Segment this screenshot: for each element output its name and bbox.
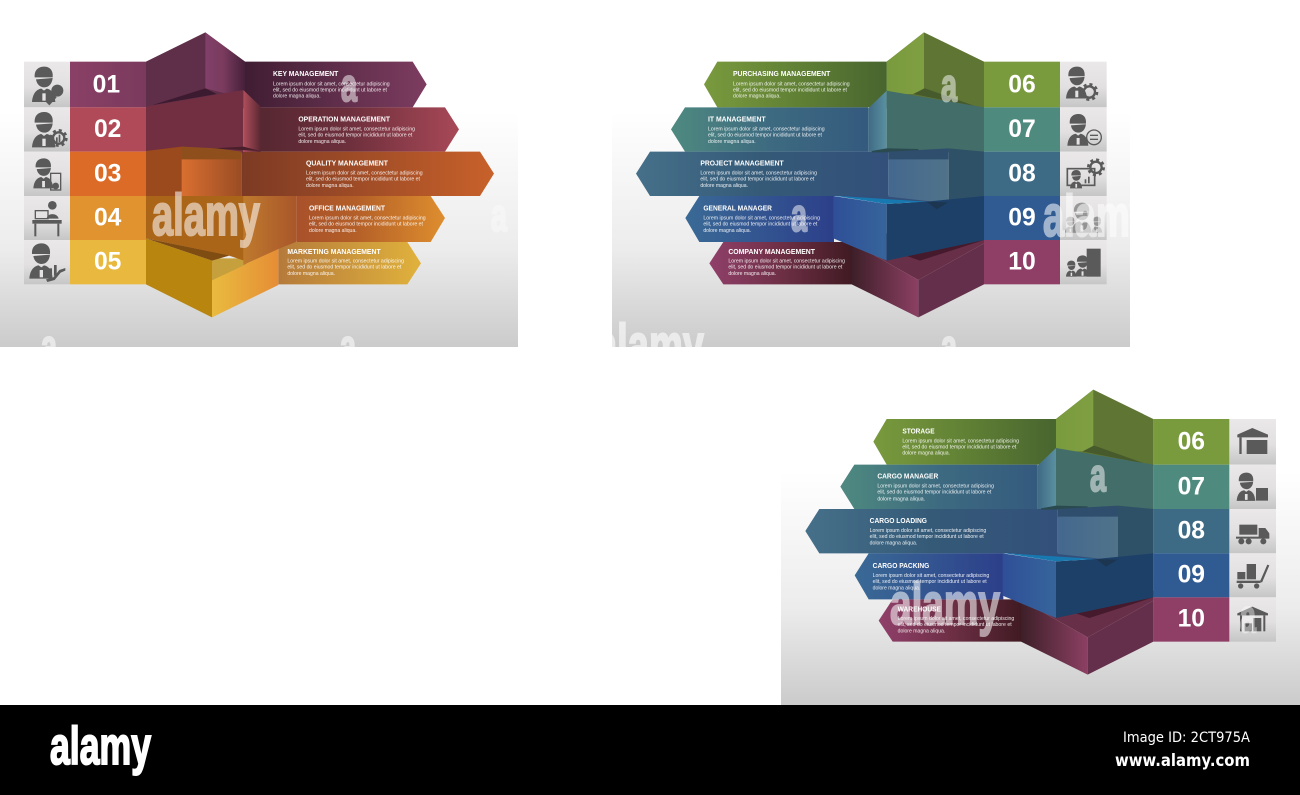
text: project management: dolore magna aliqua.	[700, 183, 748, 189]
text: operation management: OPERATION MANAGEMENT	[298, 114, 390, 123]
text: purchasing management: Lorem ipsum dolor sit amet, consectetur adipiscing	[733, 81, 850, 87]
watermarks panel three	[890, 465, 1257, 637]
footer bar	[0, 705, 1300, 795]
text: project management: elit, sed do eiusmod tempor incididunt ut labore et	[700, 177, 815, 183]
icon: warehouse with boxes	[1237, 607, 1268, 631]
text: marketing management: elit, sed do eiusmod tempor incididunt ut labore et	[287, 265, 402, 271]
text: cargo manager: CARGO MANAGER	[877, 472, 939, 481]
arrow 06	[873, 419, 1056, 465]
text: general manager: elit, sed do eiusmod tempor incididunt ut labore et	[703, 222, 818, 228]
icon: manager with growth chart	[29, 243, 65, 282]
text: cargo manager: elit, sed do eiusmod tempor incididunt ut labore et	[877, 490, 992, 496]
text: general manager: Lorem ipsum dolor sit amet, consectetur adipiscing	[703, 216, 820, 222]
number cells	[70, 62, 147, 284]
icon: manager with gear chart	[32, 112, 66, 147]
panel background	[612, 20, 1130, 347]
text: cargo packing: CARGO PACKING	[873, 561, 930, 570]
watermarks panel one: alamy	[152, 183, 260, 248]
numbers	[1008, 71, 1036, 275]
website: www.alamy.com	[1115, 751, 1250, 771]
icon: managers with building	[1066, 249, 1101, 277]
numbers: 01	[93, 71, 120, 98]
text: IT management: IT MANAGEMENT	[708, 114, 766, 123]
3D block 05	[146, 238, 278, 317]
3D block 06	[887, 32, 984, 108]
text: general manager: GENERAL MANAGER	[703, 204, 773, 213]
icon: manager with cart gear	[1066, 67, 1097, 100]
number cells	[984, 62, 1060, 284]
panel background	[781, 380, 1300, 705]
text: marketing management: dolore magna aliqua.	[287, 271, 335, 277]
text: company management: Lorem ipsum dolor sit amet, consectetur adipiscing	[728, 259, 845, 265]
arrow 08	[636, 152, 888, 196]
text: purchasing management: PURCHASING MANAGEMENT	[733, 69, 831, 78]
text: IT management: elit, sed do eiusmod tempor incididunt ut labore et	[708, 132, 822, 138]
text: key management: dolore magna aliqua.	[273, 94, 321, 100]
text: cargo loading: elit, sed do eiusmod tempor incididunt ut labore et	[870, 534, 984, 540]
text: project management: Lorem ipsum dolor sit amet, consectetur adipiscing	[700, 171, 817, 177]
numbers: 03	[94, 160, 121, 187]
arrow 10	[879, 599, 1023, 642]
3D block 04	[146, 196, 297, 265]
3D block 08	[999, 506, 1153, 561]
text: project management	[700, 159, 817, 189]
icon: manager with document	[33, 158, 61, 190]
text: cargo packing: elit, sed do eiusmod tempor incididunt ut labore et	[873, 579, 987, 585]
text: cargo manager: Lorem ipsum dolor sit amet, consectetur adipiscing	[877, 484, 994, 490]
3D block 02	[146, 90, 261, 153]
numbers: 07	[1008, 116, 1036, 143]
3D block 08	[830, 148, 984, 204]
panel background	[0, 20, 518, 347]
text: operation management: dolore magna aliqua.	[298, 139, 346, 145]
text: purchasing management: dolore magna aliqua.	[733, 93, 781, 99]
watermarks panel three: a	[1090, 449, 1106, 501]
text: operation management: Lorem ipsum dolor sit amet, consectetur adipiscing	[298, 126, 415, 132]
watermarks panel one: a	[41, 320, 57, 372]
arrow 04	[297, 196, 445, 242]
text: storage: elit, sed do eiusmod tempor incididunt ut labore et	[902, 445, 1017, 451]
text: warehouse: WAREHOUSE	[898, 604, 941, 613]
panel: management infographic 06 to 10	[612, 20, 1130, 347]
text: warehouse	[898, 604, 1014, 634]
3D block 10	[852, 233, 984, 317]
text: quality management	[306, 159, 423, 189]
arrow 07	[840, 465, 1038, 509]
text: company management: dolore magna aliqua.	[728, 271, 776, 277]
text: cargo loading	[870, 516, 986, 546]
watermarks panel one: a	[341, 59, 357, 111]
text: storage: Lorem ipsum dolor sit amet, consectetur adipiscing	[902, 439, 1019, 445]
3D block 09	[833, 196, 984, 261]
text: marketing management	[287, 247, 404, 277]
text: storage: STORAGE	[902, 426, 935, 435]
numbers: 08	[1178, 518, 1205, 545]
text: cargo loading: dolore magna aliqua.	[870, 540, 918, 546]
text: operation management: elit, sed do eiusmod tempor incididunt ut labore et	[298, 132, 413, 138]
text: operation management	[298, 114, 415, 145]
3D block 10	[1021, 591, 1153, 675]
text: quality management: Lorem ipsum dolor sit amet, consectetur adipiscing	[306, 171, 423, 177]
text: company management: COMPANY MANAGEMENT	[728, 247, 815, 256]
numbers: 10	[1178, 606, 1205, 633]
icon: hand trolley with boxes	[1237, 564, 1269, 589]
icon: manager with wrench	[32, 67, 63, 105]
watermarks panel one: a	[491, 189, 507, 241]
icon cell column	[1229, 419, 1276, 642]
text: cargo loading: CARGO LOADING	[870, 516, 927, 525]
text: storage	[902, 426, 1019, 457]
icon: container truck	[1236, 525, 1269, 544]
icon: warehouse with container	[1237, 428, 1268, 454]
diagram 01-05	[24, 32, 494, 317]
arrow 02	[257, 107, 459, 152]
numbers: 05	[94, 248, 122, 275]
arrow 06	[704, 62, 887, 107]
3D block 03	[146, 147, 242, 197]
arrow 10	[709, 242, 853, 284]
3D block 06	[1056, 390, 1153, 466]
numbers: 04	[94, 204, 122, 231]
text: cargo manager: dolore magna aliqua.	[877, 496, 925, 502]
numbers: 02	[94, 116, 121, 143]
icon: presentation screen with gear	[1067, 160, 1104, 188]
diagram cargo	[805, 390, 1276, 675]
number cells	[1153, 419, 1229, 642]
text: key management: Lorem ipsum dolor sit amet, consectetur adipiscing	[273, 81, 390, 87]
icon: worker at desk	[32, 201, 62, 236]
diagram 06-10	[636, 32, 1107, 317]
numbers: 08	[1008, 160, 1036, 187]
numbers: 09	[1008, 204, 1036, 231]
icon cell column	[1060, 62, 1107, 284]
numbers	[1178, 429, 1205, 633]
arrow 09	[685, 196, 834, 242]
icon cell column	[24, 62, 70, 284]
text: warehouse: dolore magna aliqua.	[898, 628, 946, 634]
numbers: 07	[1178, 473, 1205, 500]
watermarks panel two: alamy	[1043, 184, 1151, 249]
text: cargo manager	[877, 472, 994, 502]
text: general manager: dolore magna aliqua.	[703, 228, 751, 234]
text: marketing management: MARKETING MANAGEMENT	[287, 247, 381, 256]
watermarks panel two	[612, 75, 1128, 347]
text: key management: KEY MANAGEMENT	[273, 69, 339, 78]
text: office management: Lorem ipsum dolor sit amet, consectetur adipiscing	[309, 216, 426, 222]
text: purchasing management: elit, sed do eiusmod tempor incididunt ut labore et	[733, 87, 847, 93]
3D block 09	[1003, 553, 1153, 618]
arrow 03	[242, 152, 494, 196]
text: cargo packing: Lorem ipsum dolor sit amet, consectetur adipiscing	[873, 573, 989, 579]
icon: group of managers	[1065, 203, 1102, 233]
text: company management: elit, sed do eiusmod tempor incididunt ut labore et	[728, 265, 843, 271]
text: storage: dolore magna aliqua.	[902, 451, 950, 457]
watermarks panel three: alamy	[890, 572, 1000, 637]
watermarks panel two: alamy	[596, 313, 704, 378]
text: marketing management: Lorem ipsum dolor sit amet, consectetur adipiscing	[287, 259, 404, 265]
arrow 09	[855, 553, 1003, 599]
numbers: 06	[1178, 429, 1205, 456]
watermarks panel one	[42, 75, 358, 347]
text: quality management: elit, sed do eiusmod tempor incididunt ut labore et	[306, 177, 420, 183]
arrow 05	[278, 242, 421, 284]
numbers: 06	[1008, 71, 1036, 98]
text: warehouse: elit, sed do eiusmod tempor incididunt ut labore et	[898, 622, 1012, 628]
text: key management: elit, sed do eiusmod tempor incididunt ut labore et	[273, 87, 387, 93]
text: office management: dolore magna aliqua.	[309, 228, 357, 234]
arrow 01	[245, 62, 427, 107]
numbers	[93, 71, 122, 275]
text: purchasing management	[733, 69, 850, 99]
3D block 01	[146, 32, 245, 108]
watermarks panel one: a	[340, 320, 356, 372]
footer logo: alamy	[50, 717, 151, 776]
text: office management: elit, sed do eiusmod tempor incididunt ut labore et	[309, 222, 423, 228]
text: IT management: Lorem ipsum dolor sit amet, consectetur adipiscing	[708, 126, 825, 132]
icon: manager with network circle	[1067, 114, 1101, 146]
text: cargo packing	[873, 561, 989, 591]
arrow 08	[805, 509, 1058, 553]
panel: cargo infographic 06 to 10	[781, 380, 1300, 705]
3D block 07	[1038, 448, 1153, 510]
numbers: 09	[1178, 562, 1205, 589]
3D block 07	[868, 91, 984, 152]
arrow 07	[671, 107, 868, 152]
text: office management: OFFICE MANAGEMENT	[309, 204, 385, 213]
watermarks panel two: a	[941, 320, 957, 372]
text: IT management: dolore magna aliqua.	[708, 139, 756, 145]
watermarks panel three: a	[1240, 590, 1256, 642]
text: warehouse: Lorem ipsum dolor sit amet, consectetur adipiscing	[898, 616, 1014, 622]
image id: Image ID: 2CT975A	[1123, 730, 1250, 746]
numbers: 10	[1008, 248, 1036, 275]
text: general manager	[703, 204, 820, 234]
text: cargo packing: dolore magna aliqua.	[873, 585, 921, 591]
watermarks panel two: a	[941, 59, 957, 111]
panel: management infographic 01 to 05	[0, 20, 518, 347]
text: company management	[728, 247, 845, 277]
text: quality management: QUALITY MANAGEMENT	[306, 159, 388, 168]
text: key management	[273, 69, 390, 100]
text: office management	[309, 204, 426, 234]
text: quality management: dolore magna aliqua.	[306, 183, 354, 189]
text: project management: PROJECT MANAGEMENT	[700, 159, 784, 168]
text: IT management	[708, 114, 825, 145]
watermarks panel two: a	[791, 189, 807, 241]
icon: cargo manager with box	[1237, 473, 1268, 501]
text: cargo loading: Lorem ipsum dolor sit amet, consectetur adipiscing	[870, 528, 986, 534]
